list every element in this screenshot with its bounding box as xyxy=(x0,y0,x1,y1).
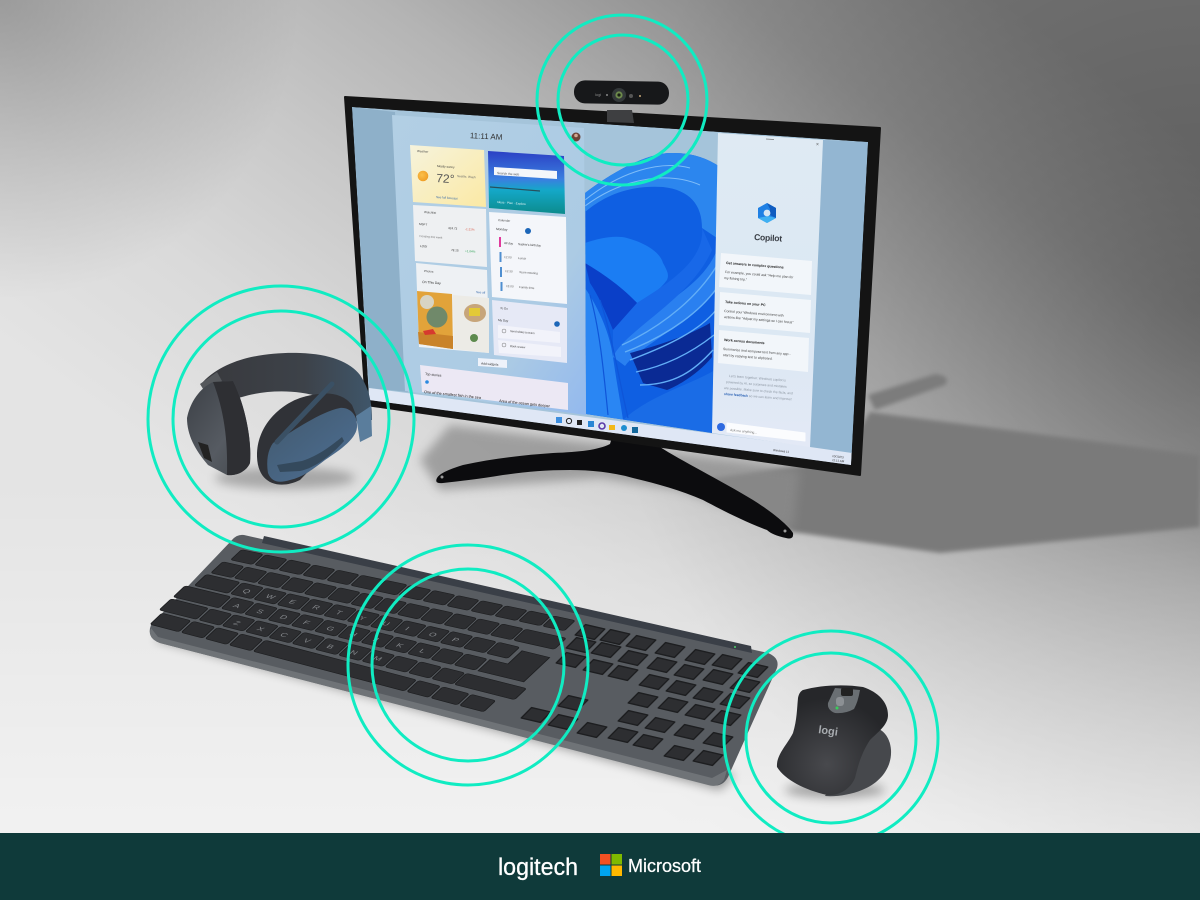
see more button: Add widgets xyxy=(481,362,499,367)
copilot card: answers: Get answers to complex questions xyxy=(726,261,784,270)
photos widget: Photos xyxy=(424,269,434,274)
function row xyxy=(231,550,575,631)
photos widget xyxy=(416,263,489,353)
travel widget: Ideas · Plan · Explore xyxy=(497,200,526,206)
copilot logo xyxy=(758,203,776,223)
photos widget: See all xyxy=(476,290,486,295)
finance widget: MSFT xyxy=(419,222,428,227)
finance widget: LOGI xyxy=(420,244,428,249)
copilot disclaimer: Let's learn together. Windows copilot is xyxy=(729,374,786,382)
weather widget: Seattle, Wash xyxy=(457,174,476,179)
mouse shadow xyxy=(785,782,885,798)
keyboard shadow xyxy=(155,625,735,790)
to do widget: My Day xyxy=(498,318,509,323)
copilot panel xyxy=(712,133,823,447)
to do widget xyxy=(492,300,567,363)
left ear cup xyxy=(187,381,250,475)
calendar widget: Calendar xyxy=(498,218,510,223)
calendar widget: Sophie's birthday xyxy=(518,242,542,248)
copilot disclaimer xyxy=(724,374,793,401)
right ear cup xyxy=(257,384,372,485)
finance widget: +1.04% xyxy=(465,249,476,254)
weather widget: Weather xyxy=(417,149,428,154)
top letter row xyxy=(194,574,520,658)
copilot disclaimer: powered by AI, so surprises and mistakes xyxy=(726,380,787,389)
mouse top controls xyxy=(828,688,860,713)
finance widget xyxy=(413,205,487,267)
copilot card: answers: my fishing trip." xyxy=(724,276,748,282)
webcam clip xyxy=(607,110,634,123)
copilot card: documents: start by copying text to clipboard. xyxy=(723,353,773,361)
weather widget xyxy=(410,145,486,207)
monitor xyxy=(345,97,880,475)
taskbar icons: Windows 11 xyxy=(773,448,790,454)
headset hinge xyxy=(356,406,372,442)
numeric keypad xyxy=(608,643,768,765)
copilot heading: Copilot xyxy=(754,232,783,243)
calendar widget xyxy=(489,212,567,304)
webcam: logi xyxy=(595,92,601,97)
news widget: Top stories xyxy=(425,372,442,378)
speaker strip xyxy=(262,536,752,653)
calendar widget: 13:30 xyxy=(505,269,513,274)
calendar widget: Team meeting xyxy=(519,270,538,275)
desktop background xyxy=(352,107,868,465)
news widget: Area of the ocean gets deeper xyxy=(499,399,551,408)
microsoft logo xyxy=(600,854,622,876)
copilot disclaimer: share feedback so we can learn and improve! xyxy=(724,392,792,401)
copilot input xyxy=(717,423,805,441)
taskbar icons xyxy=(556,417,845,464)
taskbar xyxy=(369,388,852,466)
mouse body xyxy=(777,685,888,795)
monitor bezel xyxy=(345,97,880,475)
calendar widget: Family time xyxy=(519,285,535,290)
screen xyxy=(352,107,868,466)
wallpaper bloom xyxy=(585,153,720,440)
webcam body xyxy=(574,80,669,105)
travel widget xyxy=(488,151,565,214)
finance widget: Watchlist xyxy=(424,210,436,215)
copilot card: documents: Summarize and compose text from any app - xyxy=(723,347,791,356)
arrow keys xyxy=(521,696,607,737)
copilot right margin xyxy=(810,140,868,453)
calendar widget: 15:00 xyxy=(506,284,514,289)
weather widget: 72° xyxy=(436,171,455,186)
monitor shadow xyxy=(420,374,1200,553)
to do widget: Book review xyxy=(510,344,526,349)
copilot card: actions: Control your Windows environment with xyxy=(724,309,784,318)
mouse side panel xyxy=(825,727,891,796)
copilot input: Ask me anything... xyxy=(730,428,757,435)
copilot card: actions: Take actions on your PC xyxy=(725,300,766,307)
finance widget: Trending this week xyxy=(419,234,443,240)
calendar widget: All day xyxy=(504,241,514,246)
navigation keys xyxy=(556,625,656,680)
logitech wordmark: logitech xyxy=(498,854,578,881)
bottom row xyxy=(150,613,496,712)
to do widget: To Do xyxy=(500,306,508,311)
finance widget: 424.73 xyxy=(448,226,458,231)
mouse logo: logi xyxy=(818,724,839,739)
travel widget: Search the web xyxy=(497,171,520,177)
highlight rings: keyboard xyxy=(348,545,588,785)
photos widget: On This Day xyxy=(422,280,441,285)
monitor stand xyxy=(436,430,793,538)
home row xyxy=(173,573,550,682)
copilot card: answers xyxy=(719,253,812,295)
microphone boom xyxy=(277,384,332,442)
microsoft wordmark: Microsoft xyxy=(628,855,701,876)
copilot card: documents: Work across documents xyxy=(724,338,765,345)
calendar widget: Lunch xyxy=(518,256,527,261)
calendar widget: 12:00 xyxy=(504,255,512,260)
weather widget: See full forecast xyxy=(436,195,458,201)
highlight rings: mouse xyxy=(724,631,938,845)
clock: 11:11 AM xyxy=(470,131,503,142)
to do widget: Send slides to team xyxy=(510,329,535,335)
see more button xyxy=(478,358,507,368)
mouse xyxy=(777,685,891,798)
keyboard base xyxy=(150,535,778,786)
footer bar xyxy=(0,833,1200,900)
shift row xyxy=(159,599,526,700)
main key block xyxy=(150,550,575,712)
copilot disclaimer: are possible. Make sure to check the facts, and xyxy=(724,386,793,395)
copilot panel: × xyxy=(816,142,819,148)
profile avatar xyxy=(572,132,580,142)
widgets panel xyxy=(392,115,586,415)
taskbar icons: 10/10/23 xyxy=(832,454,844,459)
copilot card: actions: actions like "Adjust my settings so I can focus" xyxy=(724,315,794,325)
finance widget: 78.15 xyxy=(451,248,459,253)
headset xyxy=(187,353,372,489)
keyboard xyxy=(150,535,778,790)
calendar widget: Monday xyxy=(496,227,508,232)
webcam xyxy=(574,80,669,123)
highlight rings: webcam xyxy=(537,15,707,185)
copilot card: documents xyxy=(718,330,809,372)
highlight rings: headset xyxy=(148,286,414,552)
news widget xyxy=(420,365,568,410)
weather widget: Mostly sunny xyxy=(437,164,455,169)
headband xyxy=(202,353,372,420)
finance widget: -1.21% xyxy=(465,227,475,232)
taskbar icons: 11:11 AM xyxy=(832,458,845,464)
copilot card: actions xyxy=(719,292,811,333)
copilot card: answers: For example, you could ask "Help me plan for xyxy=(725,270,794,279)
headset shadow xyxy=(215,467,355,489)
number row xyxy=(211,562,566,649)
news widget: One of the smallest fish in the sea xyxy=(424,390,482,400)
